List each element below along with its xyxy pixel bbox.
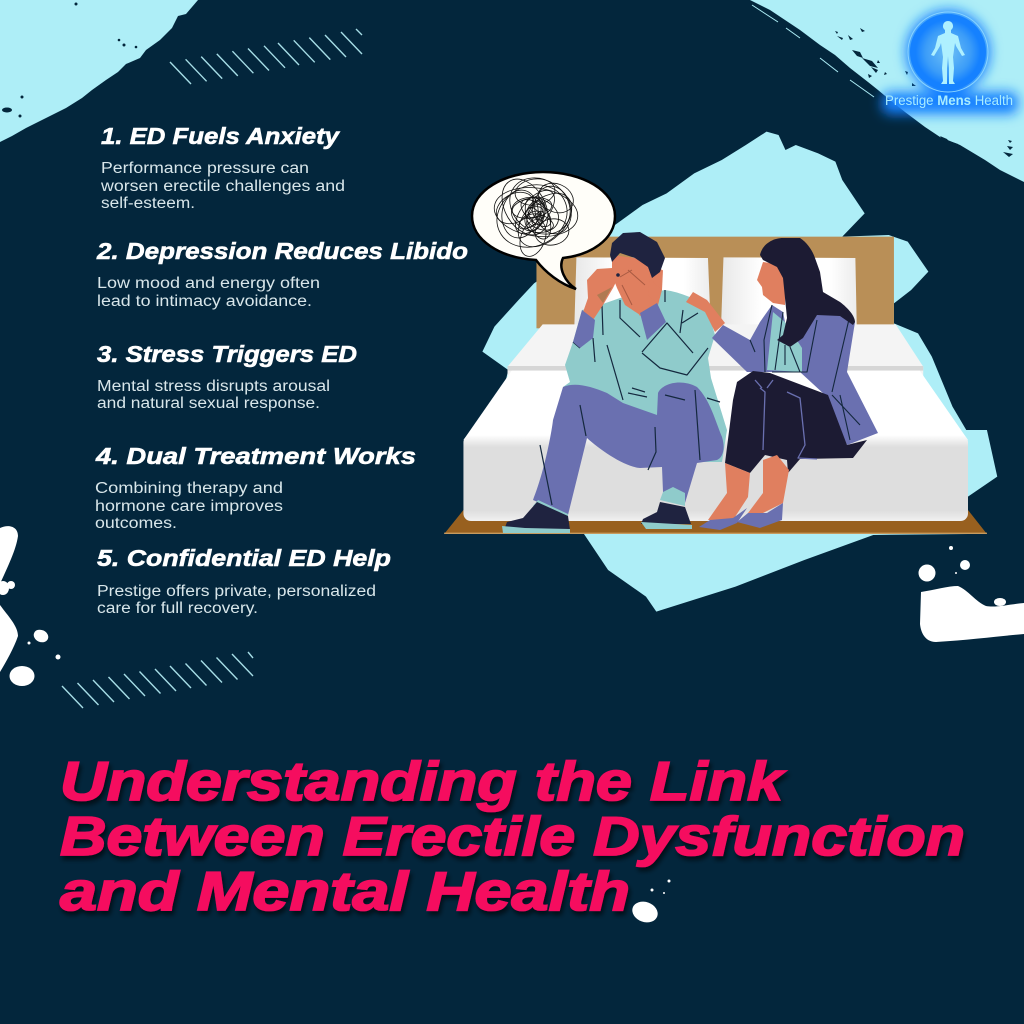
pillows: [574, 257, 711, 327]
list item 1: Performance pressure can: [101, 160, 309, 177]
woman: jacket: [712, 295, 878, 445]
front mattress side: [463, 435, 968, 521]
man: sleeves: [640, 303, 666, 340]
woman: legs: [708, 463, 750, 520]
list item 1: self-esteem.: [101, 195, 195, 212]
hatch lines: top: [170, 29, 362, 84]
headboard: [536, 237, 894, 328]
list item 2: Low mood and energy often: [97, 275, 320, 292]
brush stroke behind bed: [482, 132, 997, 612]
list item 4: hormone care improves: [95, 498, 283, 515]
list item 5: [97, 545, 391, 617]
list item 4: Combining therapy and: [95, 480, 283, 497]
list item 3: and natural sexual response.: [97, 395, 320, 412]
list item 5: care for full recovery.: [97, 600, 258, 617]
logo glow: [882, 10, 1018, 114]
woman: top: [767, 312, 802, 372]
man: socks: [660, 487, 685, 506]
platform: [444, 510, 987, 534]
man: left hand: [582, 268, 617, 320]
list item 3: Mental stress disrupts arousal: [97, 378, 330, 395]
list item 1: 1. ED Fuels Anxiety: [101, 123, 340, 149]
front mattress top: [463, 371, 968, 440]
man: garment lines: [540, 290, 720, 505]
man: shirt: [563, 290, 727, 462]
list item 1: [100, 123, 345, 212]
logo: [882, 10, 1018, 114]
thought bubble: [472, 166, 615, 289]
woman: jacket lines: [750, 305, 860, 440]
list item 4: 4. Dual Treatment Works: [95, 443, 416, 469]
white splatter near title: [629, 880, 670, 926]
hatch lines: bottom: [62, 652, 253, 708]
list item 1: worsen erectile challenges and: [100, 178, 345, 195]
back mattress: [508, 324, 923, 383]
title: [60, 750, 965, 922]
list item 2: lead to intimacy avoidance.: [97, 293, 312, 310]
man: shoes: [504, 502, 570, 530]
brush stroke: top left corner: [0, 0, 198, 142]
white paint splatter: left: [0, 526, 60, 686]
list item 2: [96, 238, 468, 310]
woman: shoes: [699, 508, 747, 530]
white paint splatter: right: [918, 546, 1024, 642]
title: Understanding the Link: [60, 750, 786, 812]
man: pants: [533, 383, 724, 515]
bed: [444, 237, 987, 534]
list item 5: Prestige offers private, personalized: [97, 583, 376, 600]
scribble: [487, 166, 582, 260]
man: hair: [610, 232, 665, 278]
woman: hair: [760, 238, 855, 347]
list item 2: 2. Depression Reduces Libido: [96, 238, 468, 264]
woman: leg lines: [755, 380, 817, 459]
woman: face: [757, 262, 786, 305]
logo wordmark: Prestige Mens Health: [885, 93, 1013, 108]
list item 5: 5. Confidential ED Help: [97, 545, 391, 571]
brush stroke: top right corner: [750, 0, 1024, 182]
man: face: [612, 255, 662, 315]
list item 3: [97, 341, 357, 412]
illustration: couple on bed: [444, 132, 997, 612]
list item 3: 3. Stress Triggers ED: [97, 341, 357, 367]
man: right hand: [622, 262, 657, 316]
logo: human figure: [931, 21, 965, 84]
man: ear: [653, 270, 663, 290]
woman: pants: [725, 371, 867, 473]
list item 4: outcomes.: [95, 515, 177, 532]
list item 4: [95, 443, 416, 532]
title: and Mental Health: [60, 860, 630, 922]
title: Between Erectile Dysfunction: [60, 805, 965, 867]
woman: [686, 238, 878, 530]
woman: hand: [686, 292, 725, 332]
man: [502, 232, 727, 533]
